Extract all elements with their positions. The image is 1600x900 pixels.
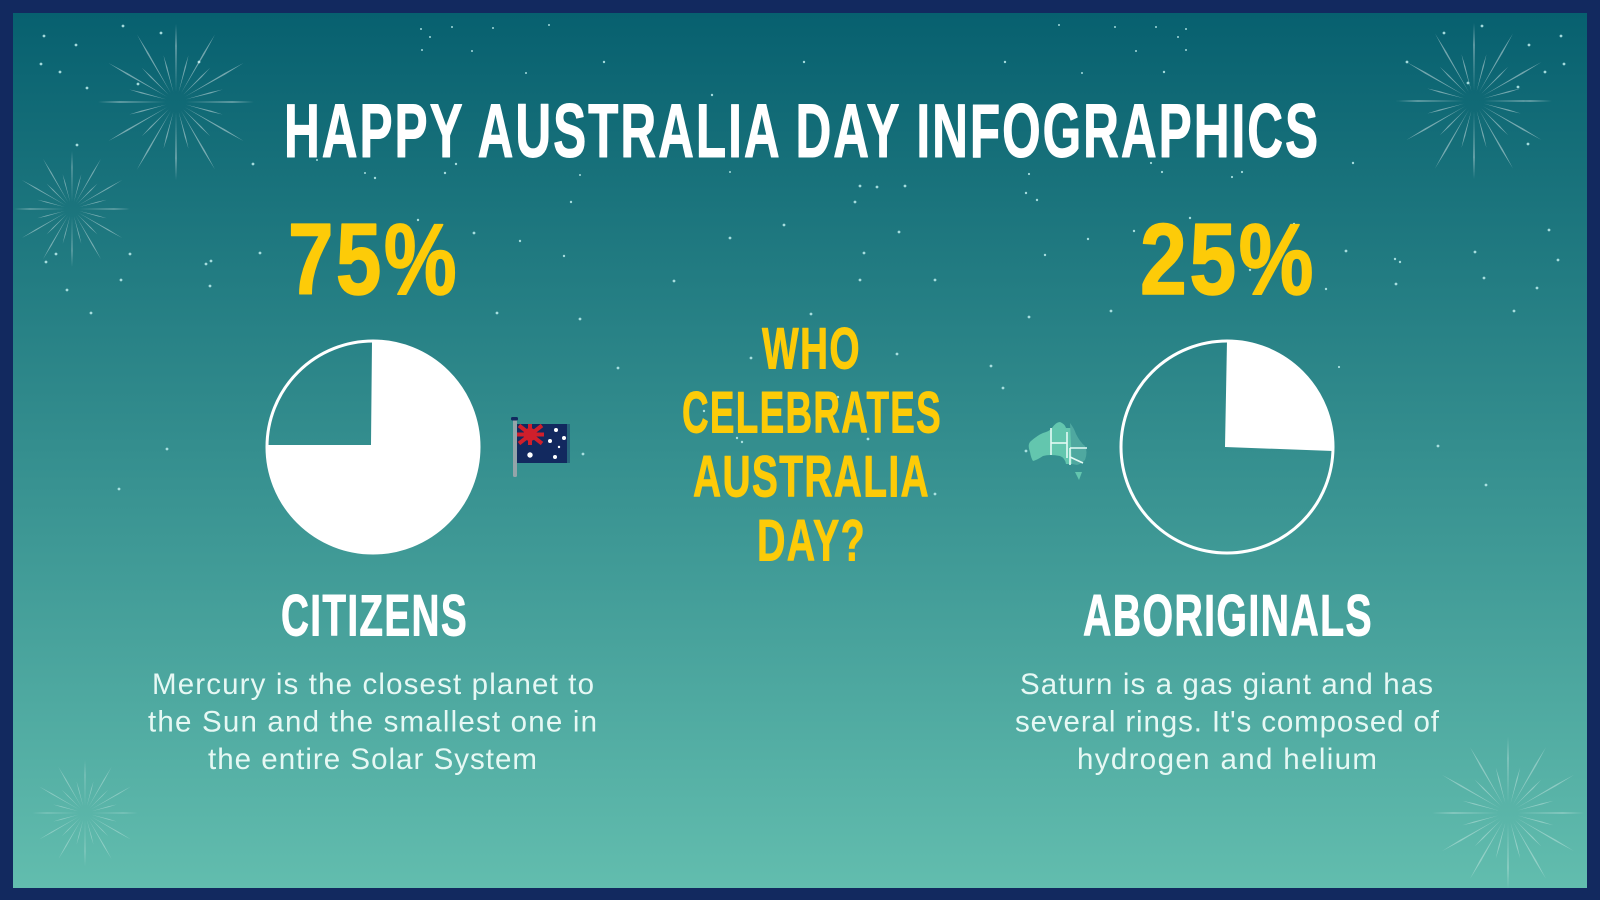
stat: 75%: 75% [288,204,459,316]
text block: citizens description: the Sun and the smallest one in [148,706,597,738]
text block: aboriginals description: Saturn is a gas giant and has [1020,668,1433,701]
firework top left [98,24,254,180]
text block: aboriginals description: hydrogen and helium [1077,743,1377,776]
text block: citizens description: the entire Solar System [208,743,537,776]
text block: aboriginals description [1015,668,1440,776]
pie chart: aboriginals 25% [1121,340,1333,553]
stat: 25%: 25% [1140,204,1316,316]
center question heading [682,316,942,574]
center question heading: WHO [762,316,861,382]
heading: citizens: CITIZENS [281,584,468,648]
center question heading: AUSTRALIA [693,444,930,510]
firework bottom right [1432,737,1584,889]
starfield [40,24,1565,495]
center question heading: DAY? [757,508,866,574]
heading: aboriginals: ABORIGINALS [1083,584,1373,648]
firework mid left [14,151,130,267]
pie chart: citizens 75% [266,340,479,553]
text block: citizens description [148,668,597,776]
text block: citizens description: Mercury is the closest planet to [152,668,594,701]
firework bottom left [32,760,138,866]
icon: australia map [1029,422,1087,480]
icon: australian flag [511,417,570,477]
center question heading: CELEBRATES [682,380,942,446]
text block: aboriginals description: several rings. It's composed of [1015,706,1440,738]
firework top right [1396,23,1552,179]
